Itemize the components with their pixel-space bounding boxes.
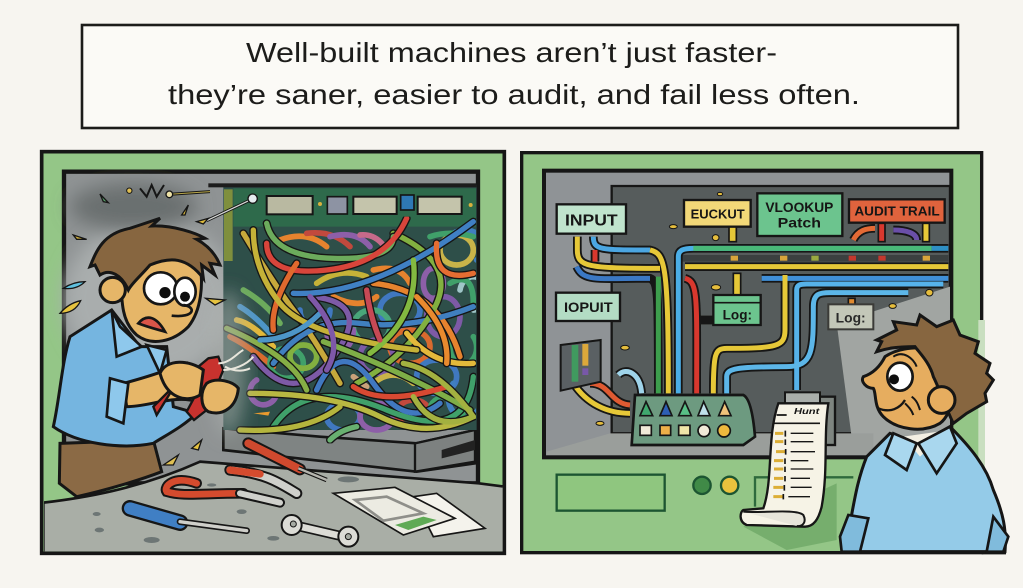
- audit log printout: Hunt: [794, 406, 821, 416]
- hair: [90, 218, 220, 290]
- icon: soldering iron: [248, 443, 327, 480]
- switch box: [632, 395, 755, 445]
- icon: screwdriver: [130, 508, 247, 531]
- panel: messy machine: [42, 152, 505, 553]
- shirt: [843, 427, 1005, 552]
- label: VLOOKUP Patch: Patch: [778, 214, 821, 230]
- board slot 1: [267, 196, 313, 214]
- forearm: [123, 363, 190, 407]
- label: AUDIT TRAIL: AUDIT TRAIL: [854, 204, 940, 219]
- machine interior: [223, 185, 477, 430]
- small marks: [596, 192, 933, 425]
- machine housing: [64, 172, 478, 483]
- label: INPUT: [557, 204, 626, 234]
- label: VLOOKUP Patch: [757, 193, 842, 236]
- wire smoke haze: [210, 290, 247, 437]
- panel: organized machine: [522, 153, 1013, 553]
- trousers: [59, 440, 162, 497]
- spark wire: [127, 185, 257, 221]
- man: stressed: [53, 218, 253, 497]
- brow and wrinkles: [893, 354, 920, 415]
- panel frame: [522, 153, 982, 553]
- collar: [885, 427, 957, 473]
- label: AUDIT TRAIL: [849, 199, 945, 223]
- printer: [785, 392, 835, 445]
- circuit board: [224, 188, 476, 261]
- collar: [112, 310, 167, 373]
- undershirt: [903, 430, 950, 457]
- mouth: [138, 318, 165, 332]
- head: [121, 253, 201, 341]
- frayed wires: [218, 350, 253, 371]
- man: calm: [840, 315, 1008, 552]
- board slot 2: [327, 197, 347, 214]
- sweat and spark marks: [60, 194, 270, 465]
- label: IOPUIT: [556, 293, 620, 321]
- wire cutters: [153, 357, 223, 420]
- machine housing: [544, 171, 951, 457]
- board slot 4: [418, 197, 462, 214]
- title line 1: Well-built machines aren’t just faster-: [246, 37, 777, 68]
- box lamps: [640, 402, 731, 437]
- shirt: [53, 310, 197, 446]
- icon: wrench: [282, 515, 358, 547]
- label connectors: [729, 223, 929, 305]
- label: EUCKUT: [684, 200, 751, 227]
- paper shadow: [743, 483, 837, 550]
- hair: [877, 315, 993, 423]
- ear: [100, 277, 125, 303]
- title banner: [82, 25, 958, 128]
- tangled wires: [227, 218, 486, 440]
- wire ports block: [561, 340, 601, 391]
- label: INPUT: INPUT: [565, 212, 618, 229]
- panel frame: [42, 152, 504, 553]
- machine interior: [612, 186, 950, 433]
- icon: schematic papers: [333, 487, 485, 537]
- title line 2: they’re saner, easier to audit, and fail less often.: [168, 79, 860, 110]
- server chassis: [223, 428, 475, 472]
- smile: [878, 400, 905, 410]
- hands: [160, 362, 203, 399]
- label: EUCKUT: EUCKUT: [691, 206, 745, 221]
- front panel controls: [557, 475, 853, 511]
- pipes: [573, 228, 948, 413]
- workbench: [43, 462, 505, 553]
- nose: [172, 305, 192, 316]
- eyes: [144, 272, 177, 304]
- icon: pliers: [166, 470, 297, 503]
- dense background loops: [230, 230, 486, 430]
- label: Log green: [713, 295, 761, 325]
- label: Log grey: [828, 304, 873, 329]
- cuff: [840, 515, 868, 552]
- eye: [887, 363, 913, 391]
- board slot 3: [353, 197, 397, 214]
- label: Log grey: Log:: [836, 310, 866, 326]
- label: VLOOKUP Patch: VLOOKUP: [765, 199, 833, 215]
- head: [862, 348, 953, 429]
- label: IOPUIT: IOPUIT: [564, 299, 613, 315]
- label: Log green: Log:: [723, 306, 752, 322]
- ear: [928, 387, 955, 413]
- audit log printout: [741, 403, 828, 527]
